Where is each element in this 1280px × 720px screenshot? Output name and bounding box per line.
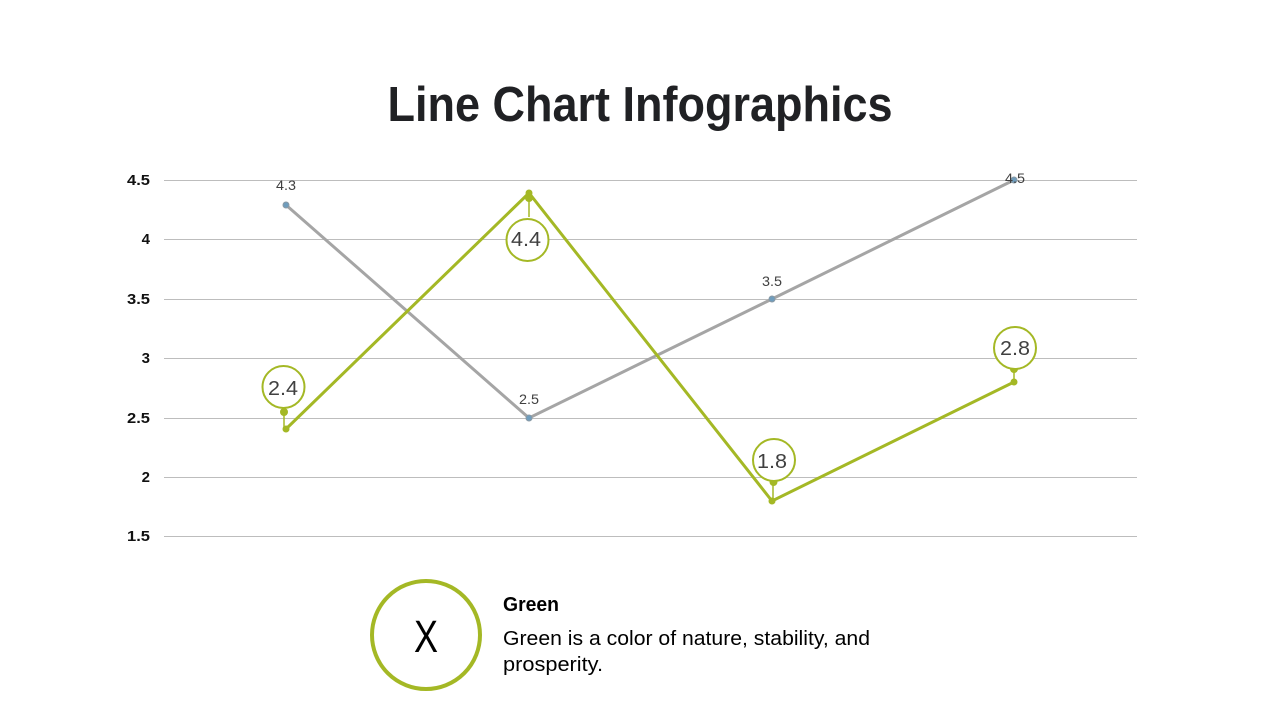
title: Line Chart Infographics bbox=[388, 78, 892, 132]
legend text: Green bbox=[503, 594, 559, 616]
callout: 4.4: 4.4 bbox=[511, 229, 541, 251]
gray series line bbox=[276, 171, 1025, 421]
y axis labels: 1.5 bbox=[127, 528, 150, 545]
y axis labels: 2 bbox=[142, 469, 150, 486]
callout: 2.8 bbox=[994, 327, 1036, 382]
y axis labels: 3 bbox=[142, 350, 150, 367]
callout: 2.4: 2.4 bbox=[268, 378, 298, 400]
gray series line: 4.3 bbox=[276, 178, 296, 193]
gray series line: 3.5 bbox=[762, 274, 782, 289]
callout: 1.8 bbox=[753, 439, 795, 501]
gray series line: 2.5 bbox=[519, 392, 539, 407]
callout: 2.8: 2.8 bbox=[1000, 338, 1030, 360]
line chart bbox=[127, 171, 1137, 545]
y axis labels: 2.5 bbox=[127, 410, 150, 427]
legend text bbox=[503, 594, 870, 676]
legend icon: X circle: X bbox=[414, 611, 438, 662]
callout: 2.4 bbox=[262, 366, 304, 429]
y axis labels: 4 bbox=[142, 231, 151, 248]
gray series line: 4.5 bbox=[1005, 171, 1025, 186]
callout: 4.4 bbox=[506, 194, 548, 261]
y axis labels: 3.5 bbox=[127, 291, 150, 308]
legend text: Green is a color of nature, stability, and bbox=[503, 628, 870, 650]
legend icon: X circle bbox=[372, 581, 480, 689]
y axis labels bbox=[127, 172, 151, 545]
callout: 1.8: 1.8 bbox=[757, 451, 787, 473]
green series line bbox=[282, 190, 1018, 504]
y axis labels: 4.5 bbox=[127, 172, 150, 189]
legend text: prosperity. bbox=[503, 654, 603, 676]
